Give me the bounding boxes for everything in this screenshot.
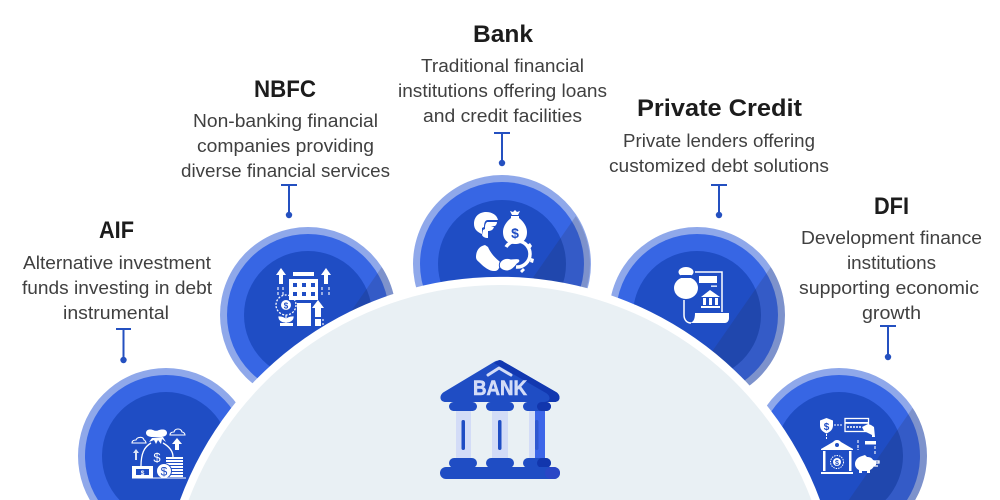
heading and text: AIF: instrumental bbox=[63, 303, 169, 323]
heading and text: NBFC: diverse financial services bbox=[181, 161, 390, 181]
icon: AIF money bag: $ bbox=[153, 450, 161, 465]
heading and text: DFI: institutions bbox=[847, 253, 936, 273]
connector: DFI bbox=[880, 326, 896, 360]
icon: AIF money bag: $ bbox=[161, 464, 168, 478]
connector: Private Credit bbox=[711, 185, 727, 218]
heading and text: NBFC: Non-banking financial bbox=[193, 111, 378, 131]
heading and text: DFI: growth bbox=[862, 303, 921, 323]
circle: AIF bbox=[78, 368, 254, 500]
icon: central bank building bbox=[440, 360, 560, 479]
icon: DFI bank and piggy bank: $ bbox=[835, 460, 839, 467]
icon: DFI bank and piggy bank bbox=[820, 418, 879, 474]
icon: Bank person with money bag: $ bbox=[511, 225, 519, 241]
heading and text: AIF: funds investing in debt bbox=[22, 278, 212, 298]
heading and text: AIF: AIF bbox=[99, 217, 134, 244]
connector: NBFC bbox=[281, 185, 297, 218]
circle: NBFC bbox=[220, 227, 394, 384]
heading and text: Bank: Traditional financial bbox=[421, 56, 584, 76]
icon: DFI bank and piggy bank: $ bbox=[824, 422, 830, 433]
heading and text: Private Credit: Private lenders offering bbox=[623, 131, 815, 151]
icon: central bank building: BANK bbox=[473, 377, 527, 400]
heading and text: DFI: Development finance bbox=[801, 228, 982, 248]
heading and text: NBFC: companies providing bbox=[197, 136, 374, 156]
heading and text: Bank: and credit facilities bbox=[423, 106, 582, 126]
circle: Bank bbox=[413, 175, 591, 288]
heading and text: AIF: Alternative investment bbox=[23, 253, 211, 273]
connector: AIF bbox=[116, 329, 131, 363]
heading and text: NBFC: NBFC bbox=[254, 76, 316, 103]
icon: AIF money bag: $ bbox=[141, 470, 145, 477]
heading and text: AIF bbox=[22, 217, 212, 323]
circle: Private Credit bbox=[611, 227, 785, 386]
white ring behind dome bbox=[180, 277, 820, 500]
heading and text: Bank: institutions offering loans bbox=[398, 81, 607, 101]
icon: Private Credit bag and document bbox=[674, 267, 729, 323]
heading and text: Private Credit: Private Credit bbox=[637, 95, 802, 122]
icon: NBFC building: $ bbox=[284, 302, 289, 310]
heading and text: Bank bbox=[398, 21, 607, 126]
heading and text: Private Credit: customized debt solutions bbox=[609, 156, 829, 176]
central dome bbox=[189, 285, 811, 500]
icon: NBFC building bbox=[276, 268, 331, 326]
connector: Bank bbox=[494, 133, 510, 166]
icon: Bank person with money bag bbox=[474, 210, 534, 273]
circle: DFI bbox=[751, 368, 927, 500]
heading and text: DFI: supporting economic bbox=[799, 278, 979, 298]
heading and text: Bank: Bank bbox=[473, 21, 534, 48]
heading and text: DFI bbox=[799, 193, 982, 323]
icon: AIF money bag bbox=[132, 429, 186, 478]
heading and text: NBFC bbox=[181, 76, 390, 181]
heading and text: Private Credit bbox=[609, 95, 829, 176]
heading and text: DFI: DFI bbox=[874, 193, 909, 220]
